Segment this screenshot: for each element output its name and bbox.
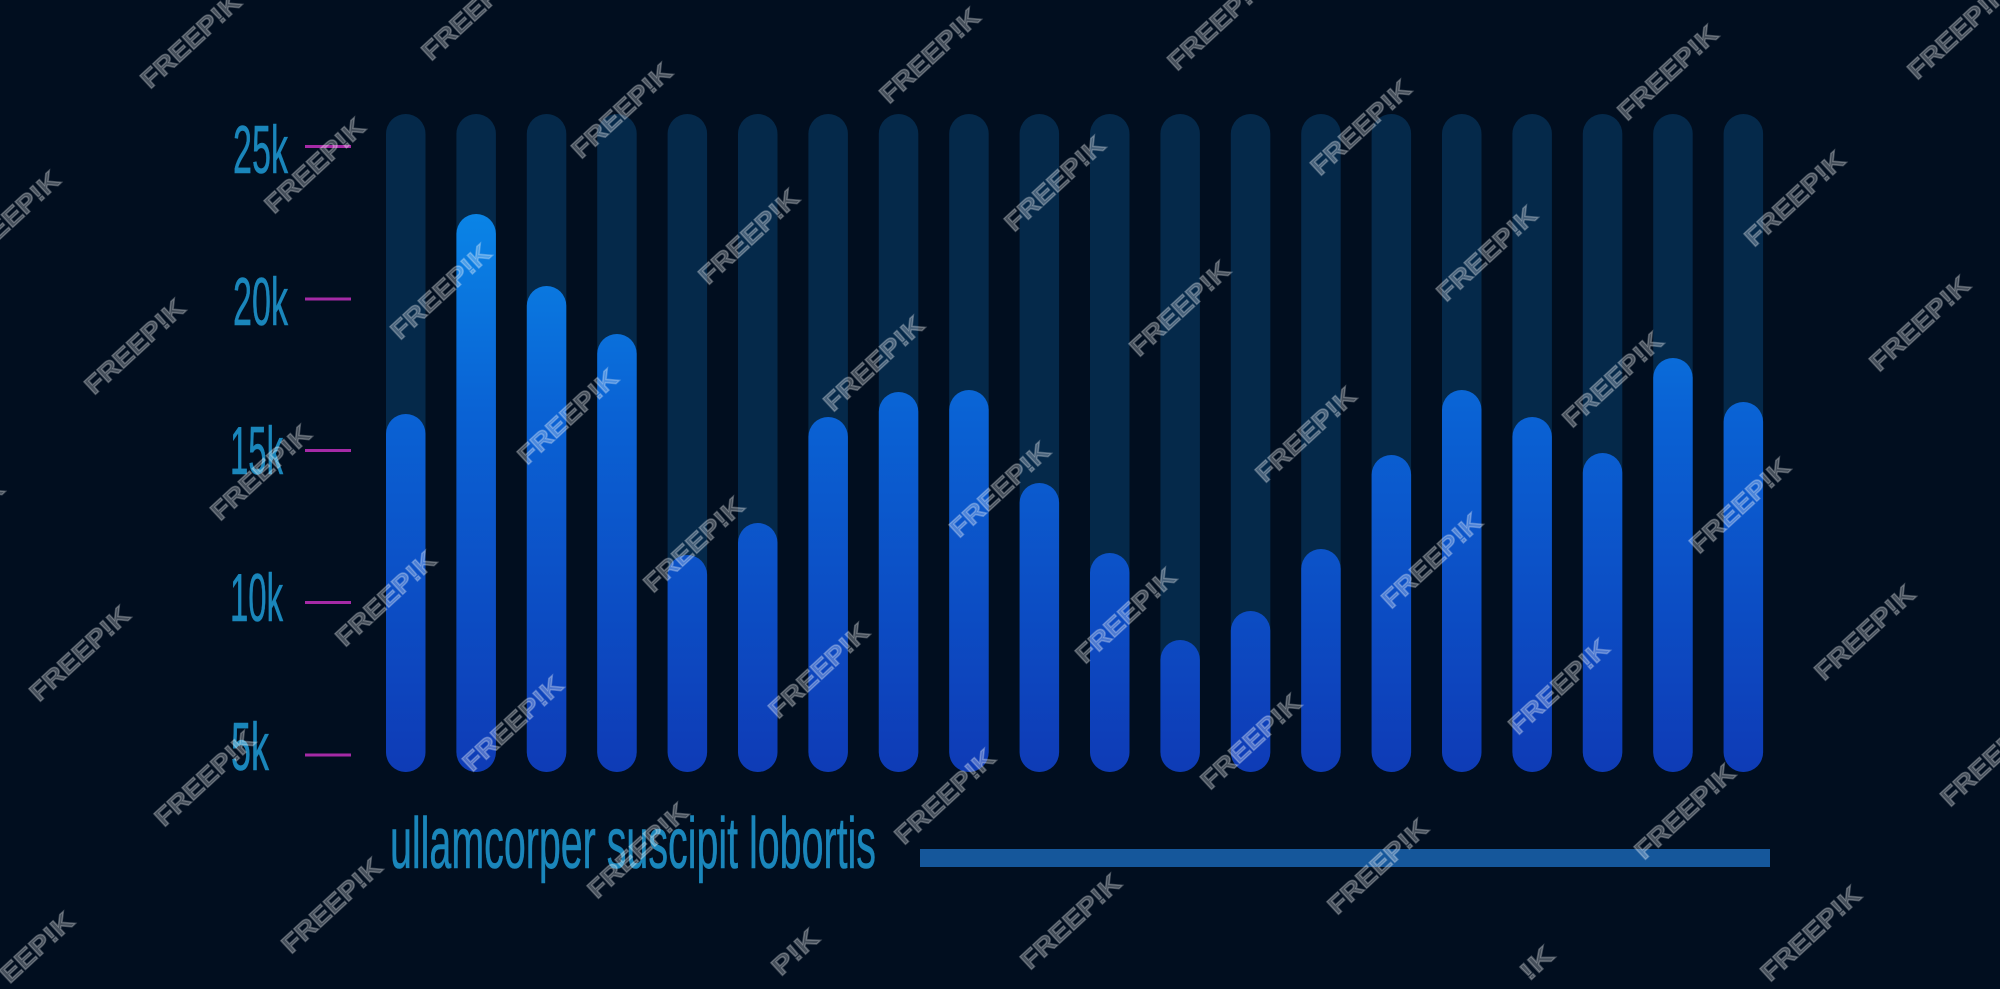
watermarks: FREEP!K [1629, 759, 1741, 865]
axis label: 25k: 25k [233, 112, 288, 188]
watermarks: FREEP!K [1557, 327, 1669, 433]
watermarks: FREEP!K [135, 0, 247, 94]
watermarks: FREEP!K [1195, 689, 1307, 795]
watermarks: FREEP!K [874, 3, 986, 109]
watermarks: FREEP!K [638, 492, 750, 598]
watermarks: FREEP!K [205, 420, 317, 526]
watermarks: FREEP!K [1124, 256, 1236, 362]
watermarks: FREEP!K [259, 113, 371, 219]
watermarks: FREEP!K [1503, 634, 1615, 740]
watermarks: FREEP!K [693, 184, 805, 290]
caption: ullamcorper suscipit lobortis [390, 804, 876, 884]
watermarks: FREEP!K [1322, 814, 1434, 920]
watermarks: FREEP!K [1612, 20, 1724, 126]
watermarks: FREEP!K [1431, 201, 1543, 307]
watermarks: FREEP!K [999, 131, 1111, 237]
watermarks: FREEP!K [1739, 146, 1851, 252]
axis label: 5k: 5k [231, 709, 270, 785]
background tracks [386, 114, 1763, 772]
caption bar [920, 849, 1770, 867]
watermarks: FREEP!K [1684, 453, 1796, 559]
y axis labels and ticks: 10k [230, 560, 283, 636]
watermarks: FREEP!K [763, 618, 875, 724]
watermarks: FREEP!K [330, 546, 442, 652]
watermarks: FREEP!K [512, 364, 624, 470]
watermarks: FREEP!K [582, 798, 694, 904]
watermarks: FREEP!K [1376, 508, 1488, 614]
watermarks: !K [1514, 941, 1560, 986]
watermarks: P!K [766, 924, 825, 981]
watermarks: FREEP!K [149, 726, 261, 832]
tick marks [305, 145, 351, 756]
watermarks: FREEP!K [1015, 869, 1127, 975]
value bars [386, 214, 1763, 772]
watermarks: FREEP!K [944, 437, 1056, 543]
watermarks: FREEP!K [1864, 271, 1976, 377]
y axis labels and ticks: 15k [230, 413, 283, 489]
watermarks: FREEP!K [79, 294, 191, 400]
watermarks: FREEP!K [1755, 881, 1867, 987]
watermarks: FREEP!K [1070, 563, 1182, 669]
watermarks: FREEP!K [818, 311, 930, 417]
watermarks: FREEP!K [889, 744, 1001, 850]
axis label: 20k: 20k [233, 264, 288, 340]
y axis labels and ticks [230, 112, 351, 785]
watermarks: FREEP!K [385, 239, 497, 345]
watermarks: FREEP!K [276, 853, 388, 959]
watermarks: FREEP!K [24, 601, 136, 707]
watermarks: FREEP!K [1809, 580, 1921, 686]
watermarks: FREEP!K [566, 58, 678, 164]
watermarks: FREEP!K [1305, 75, 1417, 181]
watermarks: FREEP!K [457, 671, 569, 777]
watermarks: FREEP!K [1250, 382, 1362, 488]
